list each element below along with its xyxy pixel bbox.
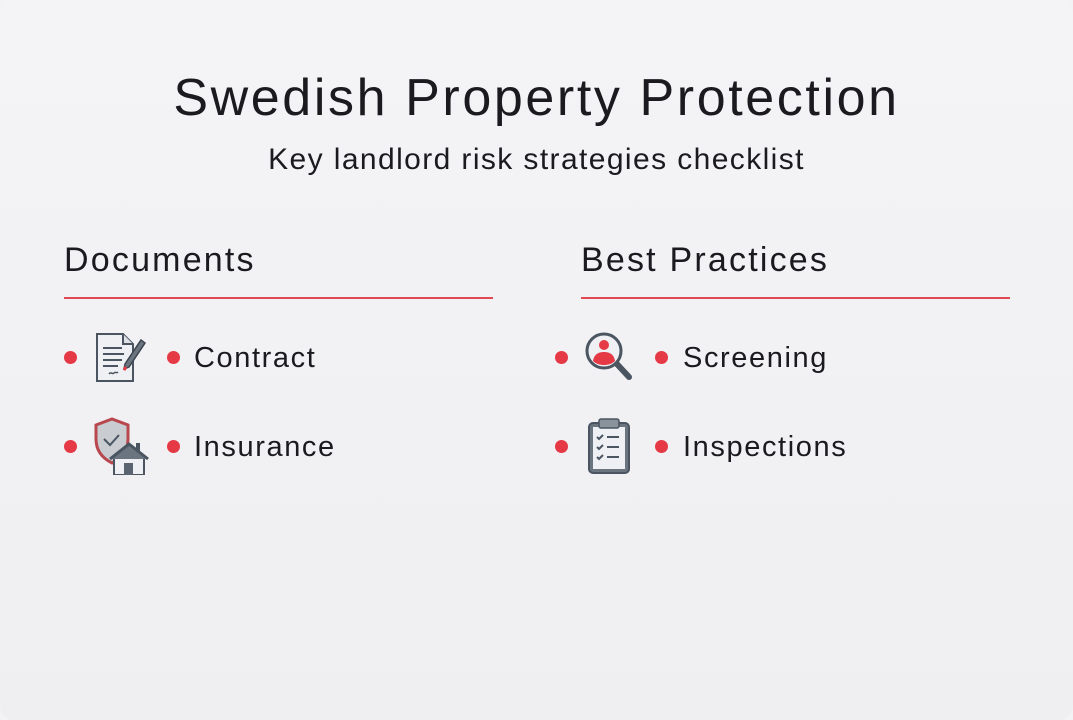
item: screening: Screening [683,342,828,374]
icon: clipboard checklist [588,418,630,474]
title: Swedish Property Protection [173,69,900,127]
icon: shield and house [94,417,149,475]
heading: documents: Documents [64,241,256,279]
item: inspections: Inspections [683,431,847,463]
item: contract [64,333,316,382]
subtitle: Key landlord risk strategies checklist [268,143,805,176]
panel: best practices [555,241,1010,474]
panel: documents [64,241,493,475]
item: screening [555,332,828,380]
item: contract: Contract [194,342,316,374]
heading: best practices: Best Practices [581,241,829,279]
icon: contract document [96,333,146,382]
item: insurance: Insurance [194,431,336,463]
item: insurance [64,417,336,475]
icon: magnifier with person [586,332,632,380]
item: inspections [555,418,847,474]
